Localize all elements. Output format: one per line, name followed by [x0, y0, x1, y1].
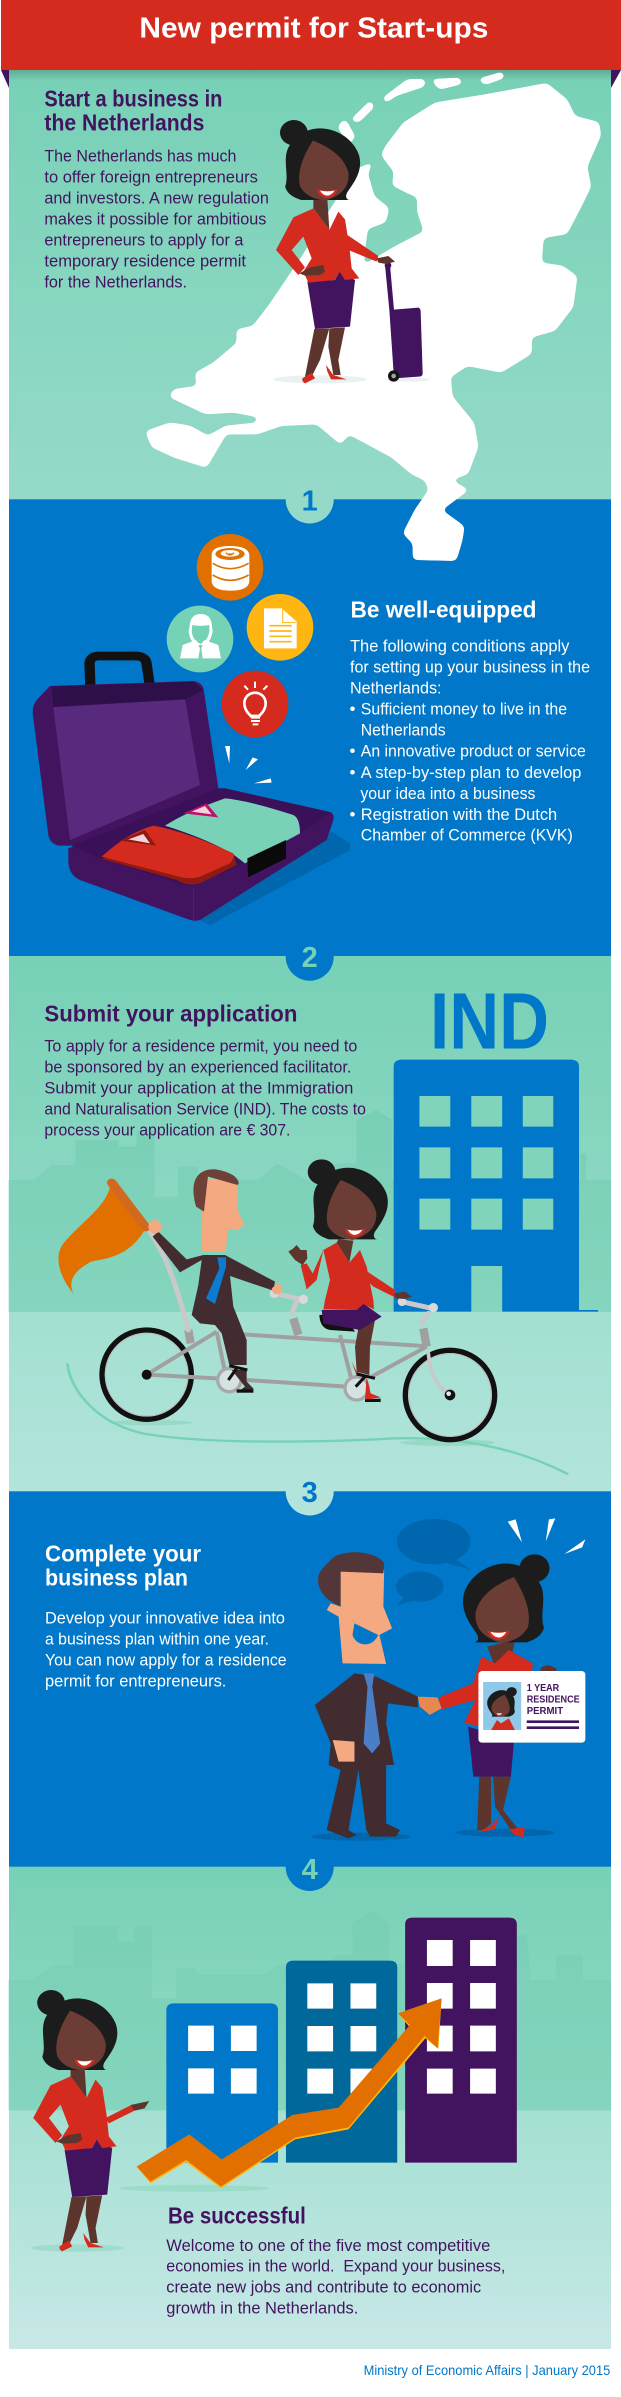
section background: be successful sky	[9, 1867, 611, 2111]
growth arrow	[119, 1998, 442, 2192]
man riding	[148, 1169, 283, 1393]
banner shadow	[9, 70, 611, 81]
IND building: IND	[430, 976, 549, 1065]
step number 1: 1	[302, 486, 318, 518]
text: conditions list: Sufficient money to live in the	[361, 700, 567, 719]
text: conditions list	[350, 636, 590, 845]
section background: be well-equipped	[9, 499, 611, 956]
text: success paragraph: Welcome to one of the five most competitive	[166, 2236, 490, 2255]
text: conditions list: An innovative product or service	[361, 742, 586, 761]
heading: submit your application: Submit your application	[44, 1001, 297, 1027]
text: application paragraph: be sponsored by an experienced facilitator.	[44, 1058, 351, 1077]
title banner: New permit for Start-ups	[139, 13, 488, 45]
banner fold right	[611, 70, 621, 88]
section background: submit application sky	[9, 956, 611, 1312]
text: conditions list: Netherlands	[361, 721, 446, 740]
heading: start a business: the Netherlands	[44, 109, 204, 135]
permit card label	[527, 1682, 580, 1717]
handshake	[418, 1697, 442, 1715]
text: intro paragraph: entrepreneurs to apply for a	[44, 231, 244, 250]
city skyline: submit application	[9, 1110, 611, 1312]
man and woman shaking hands	[312, 1518, 585, 1841]
heading: complete your business plan: Complete your	[45, 1541, 201, 1567]
section background: submit application ground	[9, 1312, 611, 1492]
text: business plan paragraph: permit for entrepreneurs.	[45, 1671, 226, 1690]
permit card label: PERMIT	[527, 1705, 564, 1717]
IND building	[394, 976, 598, 1312]
icon: businessman	[167, 606, 233, 672]
speech bubbles	[396, 1519, 470, 1605]
step number 2	[286, 933, 334, 981]
text: application paragraph: Submit your application at the Immigration	[44, 1079, 353, 1098]
text: success paragraph: economies in the world. Expand your business,	[166, 2257, 505, 2276]
text: conditions list: your idea into a business	[360, 784, 535, 803]
text: intro paragraph: and investors. A new regulation	[44, 189, 269, 208]
permit card label: RESIDENCE	[527, 1693, 580, 1705]
text: business plan paragraph: Develop your innovative idea into	[45, 1608, 285, 1627]
text: conditions list: •	[350, 700, 356, 719]
text: intro paragraph: The Netherlands has much	[44, 147, 236, 166]
permit card	[478, 1665, 585, 1743]
icon: money coins	[197, 534, 263, 601]
attention rays	[508, 1518, 585, 1554]
text: conditions list: for setting up your business in the	[350, 658, 590, 677]
permit card label: 1 YEAR	[527, 1682, 560, 1694]
text: business plan paragraph	[45, 1608, 287, 1690]
suitcase	[33, 656, 350, 925]
man	[315, 1552, 418, 1838]
text: application paragraph: To apply for a residence permit, you need to	[44, 1037, 357, 1056]
woman	[439, 1554, 549, 1837]
heading: start a business: Start a business in	[44, 86, 222, 112]
title banner	[1, 0, 621, 70]
icon: light bulb	[222, 671, 288, 737]
text: intro paragraph: for the Netherlands.	[44, 273, 187, 292]
heading: be successful: Be successful	[168, 2202, 306, 2228]
growth buildings	[166, 1918, 517, 2163]
bicycle	[102, 1229, 495, 1440]
text: conditions list: Chamber of Commerce (KVK)	[361, 826, 573, 845]
text: conditions list: •	[350, 805, 356, 824]
text: conditions list: Netherlands:	[350, 679, 442, 698]
heading: be well-equipped: Be well-equipped	[350, 597, 536, 623]
step number 3	[286, 1468, 334, 1516]
heading: start a business	[44, 86, 222, 135]
icon: document	[247, 594, 313, 661]
text: conditions list: •	[350, 763, 356, 782]
woman with suitcase	[273, 120, 430, 383]
text: business plan paragraph: You can now apply for a residence	[45, 1650, 287, 1669]
section background: start a business	[9, 70, 611, 500]
text: intro paragraph: makes it possible for ambitious	[44, 210, 266, 229]
text: conditions list: Registration with the Dutch	[361, 805, 557, 824]
text: application paragraph: and Naturalisation Service (IND). The costs to	[44, 1100, 366, 1119]
step number 2: 2	[302, 942, 318, 974]
section background: be successful ground	[9, 2111, 611, 2349]
text: success paragraph: create new jobs and contribute to economic	[166, 2278, 482, 2297]
step number 4: 4	[302, 1854, 318, 1886]
map of the Netherlands	[147, 73, 600, 560]
city skyline: be successful	[9, 1911, 611, 2111]
section background: complete business plan	[9, 1491, 611, 1867]
text: success paragraph	[166, 2236, 505, 2317]
banner fold left	[1, 70, 9, 88]
text: intro paragraph: to offer foreign entrepreneurs	[44, 168, 258, 187]
text: conditions list: •	[350, 742, 356, 761]
step number 3: 3	[302, 1477, 318, 1509]
text: business plan paragraph: a business plan within one year.	[45, 1629, 269, 1648]
text: conditions list: The following conditions apply	[350, 636, 570, 655]
woman riding	[288, 1159, 412, 1402]
text: success paragraph: growth in the Netherlands.	[166, 2298, 358, 2317]
text: intro paragraph: temporary residence permit	[44, 252, 246, 271]
text: application paragraph: process your application are € 307.	[44, 1121, 290, 1140]
step number 1	[286, 476, 334, 524]
tandem bicycle with riders	[58, 1159, 495, 1440]
road line	[67, 1363, 568, 1474]
text: intro paragraph	[44, 147, 269, 292]
woman presenting	[30, 1990, 149, 2252]
heading: complete your business plan: business plan	[45, 1565, 188, 1591]
text: conditions list: A step-by-step plan to develop	[361, 763, 581, 782]
step number 4	[286, 1843, 334, 1891]
heading: complete your business plan	[45, 1541, 201, 1591]
text: application paragraph	[44, 1037, 366, 1140]
flag	[58, 1183, 147, 1293]
